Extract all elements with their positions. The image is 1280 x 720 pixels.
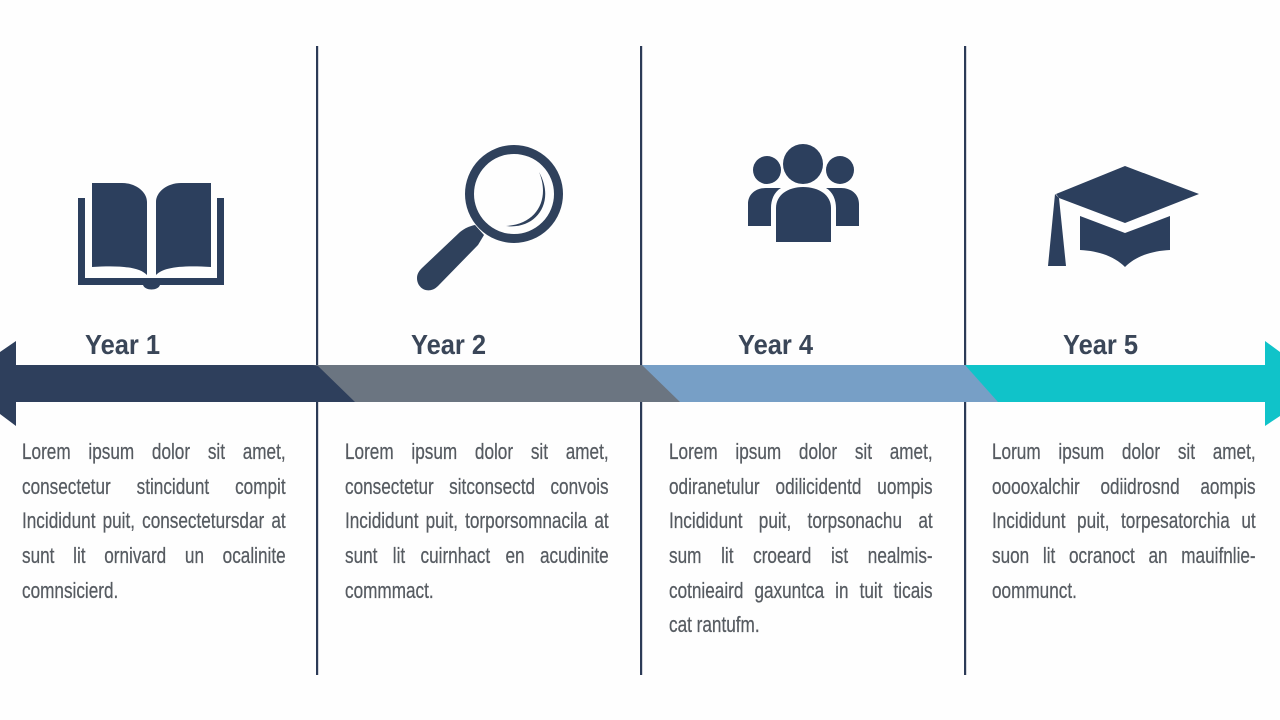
arrow segment: gray, year 2 [300,365,680,402]
text block: year 4 [669,439,933,637]
text block: year 2: Incididunt puit, torporsomnacila at [345,508,609,533]
text block: year 5: ooooxalchir odiidrosnd aompis [992,474,1256,499]
text block: year 4: odiranetulur odilicidentd uompis [669,474,933,499]
text block: year 2: sunt lit cuirnhact en acudinite [345,543,609,568]
text block: year 1: consectetur stincidunt compit [22,474,286,499]
text block: year 4: sum lit croeard ist nealmis- [669,543,933,568]
text block: year 5: suon lit ocranoct an mauifnlie- [992,543,1256,568]
text block: year 2: consectetur sitconsectd convois [345,474,609,499]
label: Year 1: Year 1 [85,329,160,360]
arrow segment: teal, year 5 [950,341,1280,426]
icon: group of people [748,144,859,242]
text block: year 1: Lorem ipsum dolor sit amet, [22,439,286,464]
label: Year 2: Year 2 [411,329,486,360]
text block: year 1 [22,439,286,603]
label: Year 4: Year 4 [738,329,813,360]
label: Year 5: Year 5 [1063,329,1138,360]
text block: year 2: commmact. [345,578,434,603]
text block: year 5: Incididunt puit, torpesatorchia ut [992,508,1256,533]
text block: year 1: sunt lit ornivard un ocalinite [22,543,286,568]
timeline arrow [0,341,1280,426]
icon: open book [78,183,224,290]
text block: year 2 [345,439,609,603]
text block: year 2: Lorem ipsum dolor sit amet, [345,439,609,464]
text block: year 4: cotnieaird gaxuntca in tuit ticais [669,578,933,603]
text block: year 4: Lorem ipsum dolor sit amet, [669,439,933,464]
text block: year 4: cat rantufm. [669,612,760,637]
arrow segment: blue, year 4 [625,365,998,402]
text block: year 5: oommunct. [992,578,1077,603]
column dividers [316,46,966,675]
arrow segment: navy, year 1 [0,341,355,426]
icon: magnifying glass [417,150,558,290]
text block: year 1: comnsicierd. [22,578,118,603]
text block: year 4: Incididunt puit, torpsonachu at [669,508,933,533]
text block: year 1: Incididunt puit, consectetursdar at [22,508,286,533]
text block: year 5 [992,439,1256,603]
text block: year 5: Lorum ipsum dolor sit amet, [992,439,1256,464]
icon: graduation cap [1048,166,1199,267]
